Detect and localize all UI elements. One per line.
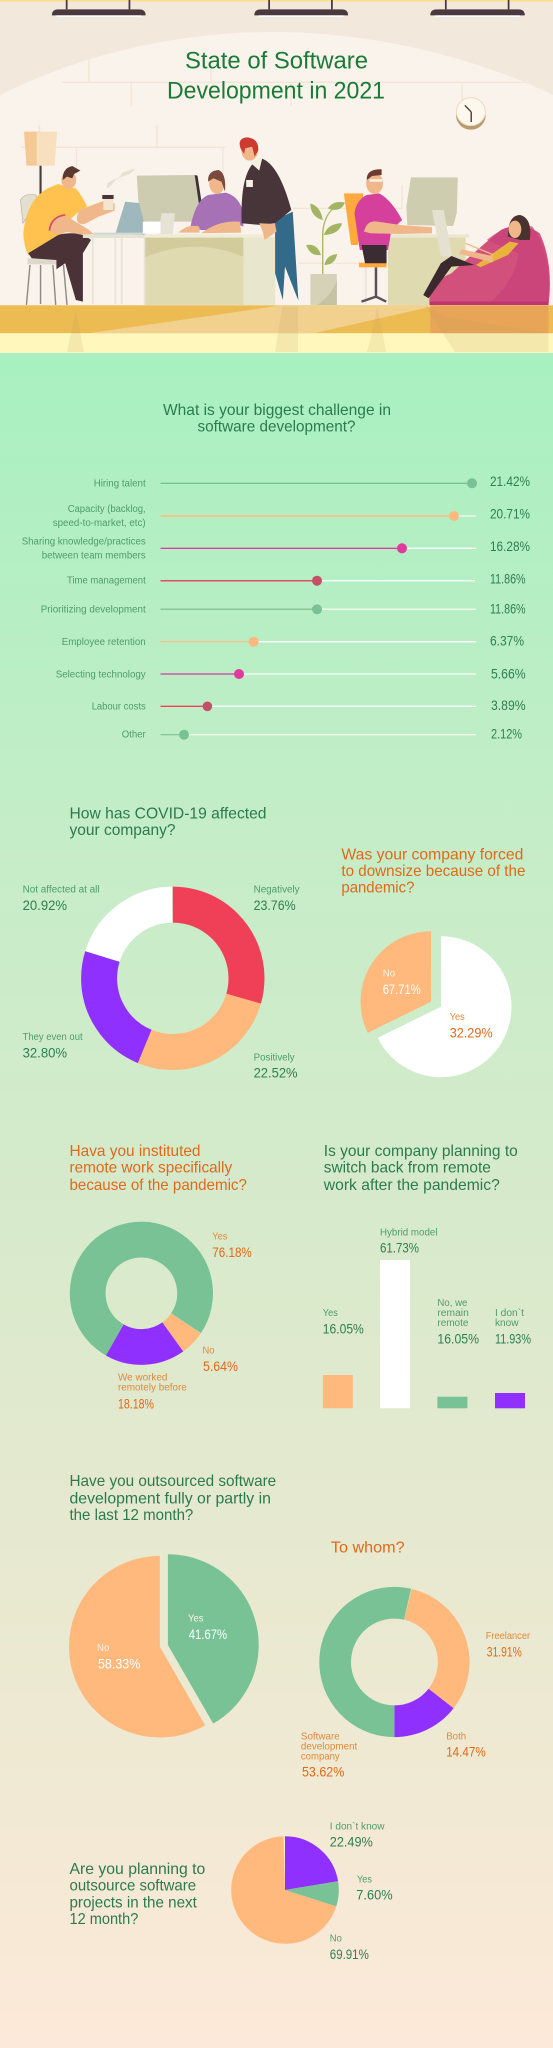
bar: yes: Yes [323,1308,338,1319]
person with coffee [20,166,136,305]
row: other [122,726,522,741]
person in pink sweater [344,169,432,302]
label: yes [450,1012,493,1040]
donut chart [323,1591,466,1733]
label: worked remotely before: We worked [118,1373,167,1384]
floor lamp [24,132,57,196]
label: both: Both [446,1731,466,1742]
label: don't know: 22.49% [330,1835,373,1850]
bar: hybrid model: Hybrid model [380,1227,438,1238]
label: negatively: 23.76% [254,898,296,913]
label: software development company: 53.62% [302,1765,344,1780]
beanbag and reclining person [423,215,550,305]
bar: yes: 16.05% [323,1321,364,1336]
pie chart [114,1600,213,1692]
panel: biggest challenge [22,402,530,741]
bar: hybrid model [380,1227,438,1408]
label: yes: Yes [450,1012,465,1023]
row: time management: 11.86% [490,571,526,586]
title [167,47,385,104]
row: hiring talent: Hiring talent [94,479,146,490]
heading: software development? [198,419,356,436]
bar: hybrid model: 61.73% [380,1241,419,1256]
bar: don't know: 11.93% [495,1331,531,1346]
bar: no, remain remote: remain [437,1308,469,1319]
row: capacity: 20.71% [490,506,530,521]
label: both: 14.47% [446,1745,486,1760]
label: no [97,1643,140,1671]
label: don't know [330,1820,385,1850]
pie chart [396,966,476,1042]
label: don't know: I don`t know [330,1820,385,1832]
panel: outsourced development [70,1473,276,1692]
person in purple sweater [178,170,243,233]
heading [323,1143,518,1194]
title: Development in 2021 [167,77,385,104]
row: capacity [53,504,530,529]
label: no: No [97,1643,110,1654]
heading: How has COVID-19 affected [70,805,266,822]
row: other: Other [122,730,146,741]
label: no: No [330,1934,342,1945]
label: no: 58.33% [98,1656,140,1671]
bar: no, remain remote: remote [437,1318,469,1329]
row: labour costs [92,698,526,713]
panel: forced to downsize [341,846,525,1042]
heading: What is your biggest challenge in [163,402,391,419]
row: time management [67,571,526,587]
donut chart [99,905,246,1052]
heading: because of the pandemic? [70,1177,247,1194]
label: positively: 22.52% [254,1066,298,1081]
heading [70,805,266,839]
row: hiring talent: 21.42% [490,474,530,489]
label: positively: Positively [254,1052,295,1063]
row: hiring talent [94,474,530,490]
heading: your company? [70,822,176,839]
row: selecting technology [56,666,526,681]
label: yes [188,1614,227,1642]
pie chart [258,1863,312,1917]
row: prioritizing development: Prioritizing development [41,605,146,616]
label: not affected [23,885,100,913]
row: sharing knowledge: 16.28% [490,539,530,554]
title: State of Software [185,47,368,74]
panel: instituted remote work [67,1143,252,1411]
heading: the last 12 month? [70,1507,193,1524]
label: yes [212,1232,252,1260]
label: they even out: They even out [23,1032,83,1043]
header illustration: office scene [0,0,553,353]
label: yes: 41.67% [189,1627,227,1642]
label: software development company: development [301,1741,358,1752]
heading [70,1143,247,1194]
heading: work after the pandemic? [323,1177,500,1194]
heading: 12 month? [70,1911,138,1928]
label: freelancer [486,1631,531,1659]
heading: outsource software [70,1878,196,1895]
row: time management: Time management [67,576,146,587]
main desk [145,234,275,305]
label: no: 69.91% [330,1947,369,1962]
label: no [202,1346,238,1374]
row: labour costs: Labour costs [92,702,146,713]
wall clock [456,98,486,130]
panel: planning to outsource [70,1820,393,1962]
heading [341,846,525,897]
heading: remote work specifically [70,1160,232,1177]
label: not affected: Not affected at all [23,885,100,896]
bar: yes [323,1308,364,1408]
row: labour costs: 3.89% [491,698,526,713]
heading [163,402,391,436]
heading: switch back from remote [324,1160,491,1177]
row: prioritizing development [41,601,526,616]
label: software development company [301,1731,358,1780]
panel: switching back from remote [323,1143,531,1408]
label: both [446,1731,486,1760]
right desk [354,234,469,305]
heading [70,1861,205,1928]
row: sharing knowledge [22,536,530,561]
label: worked remotely before: 18.18% [118,1396,154,1411]
panel: covid effect [23,805,300,1081]
heading: To whom? [331,1540,405,1557]
bar: no, remain remote [437,1298,479,1408]
label: software development company: Software [301,1731,340,1742]
label: freelancer: 31.91% [487,1644,522,1659]
monitor [137,175,203,234]
label: yes: 7.60% [356,1888,393,1903]
label: worked remotely before [118,1373,187,1411]
bar: don't know: know [495,1318,519,1329]
label: no: No [202,1346,215,1357]
row: capacity: speed-to-market, etc) [53,518,146,529]
heading: development fully or partly in [70,1490,271,1507]
row: employee retention: 6.37% [490,633,524,648]
row: other: 2.12% [491,726,522,741]
label: yes: Yes [212,1232,227,1243]
ceiling lamps [52,0,525,17]
row: sharing knowledge: between team members [42,550,146,561]
label: yes: Yes [188,1614,204,1625]
heading: Have you outsourced software [70,1473,276,1490]
label: negatively: Negatively [254,885,300,896]
row: capacity: Capacity (backlog, [68,504,146,515]
label: no: No [383,969,396,980]
row: selecting technology: Selecting technology [56,669,146,680]
standing manager [240,137,298,301]
label: yes: 76.18% [212,1245,252,1260]
label: yes: Yes [357,1874,372,1885]
label: worked remotely before: remotely before [118,1383,187,1394]
label: software development company: company [301,1751,340,1762]
bar: don't know: I don`t [495,1307,524,1319]
label: no [330,1934,369,1962]
label: no: 67.71% [383,982,421,997]
heading: pandemic? [341,880,414,897]
floor and reflections [0,305,553,353]
label: no: 5.64% [203,1359,238,1374]
row: employee retention [62,633,524,648]
laptop and side table [83,202,150,305]
label: yes [356,1874,393,1903]
heading: Are you planning to [70,1861,205,1878]
label: yes: 32.29% [450,1025,493,1040]
heading: to downsize because of the [341,863,525,880]
row: selecting technology: 5.66% [491,666,526,681]
potted plant [306,202,345,305]
row: sharing knowledge: Sharing knowledge/practices [22,536,146,547]
heading: Was your company forced [341,846,523,863]
right monitor [406,177,458,257]
heading: Is your company planning to [324,1143,518,1160]
bar: no, remain remote: No, we [437,1298,468,1309]
bar: no, remain remote: 16.05% [437,1331,479,1346]
donut chart [67,1219,216,1368]
label: no [383,969,421,997]
label: freelancer: Freelancer [486,1631,531,1642]
heading: projects in the next [70,1894,197,1911]
row: employee retention: Employee retention [62,637,146,648]
label: positively [254,1052,298,1081]
label: they even out: 32.80% [23,1045,67,1060]
heading [70,1473,276,1524]
label: negatively [254,885,300,913]
label: they even out [23,1032,83,1060]
label: not affected: 20.92% [23,898,67,913]
panel: to whom [301,1540,531,1780]
heading: Hava you instituted [70,1143,200,1160]
bar: don't know [495,1307,531,1408]
row: prioritizing development: 11.86% [490,601,526,616]
